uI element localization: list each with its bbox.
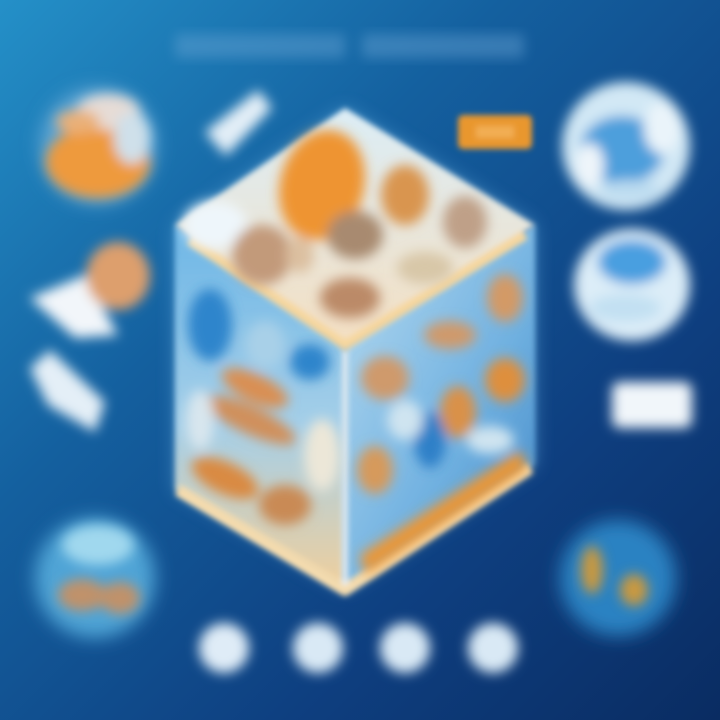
icon: white diamond top <box>205 90 272 156</box>
cube right face <box>345 225 535 590</box>
cube bottom edge <box>178 350 530 590</box>
row of four round icons <box>199 623 518 673</box>
icon detail: orange box contents <box>46 94 150 198</box>
cube left face <box>175 225 345 590</box>
title <box>175 34 524 58</box>
icon: white label right <box>612 382 692 428</box>
icon: orange label top right <box>458 115 532 149</box>
icon: white and orange box left <box>30 242 150 338</box>
icon: orange box top left <box>40 88 156 204</box>
central cube <box>175 108 535 590</box>
cube top face <box>175 108 535 345</box>
cube glow <box>175 108 535 590</box>
icon: white diamond left <box>30 350 105 432</box>
cube left face contents <box>186 289 340 525</box>
icon: circle bottom left <box>35 518 155 638</box>
cube top contents <box>183 120 487 318</box>
icon: globe top right <box>562 82 690 210</box>
icon: circle bottom right <box>560 520 676 636</box>
icon detail: circle bottom right content <box>581 546 648 606</box>
icon detail: circle bottom left content <box>58 525 140 614</box>
cube right face contents <box>357 274 528 575</box>
icon: blue dish right <box>574 229 690 341</box>
